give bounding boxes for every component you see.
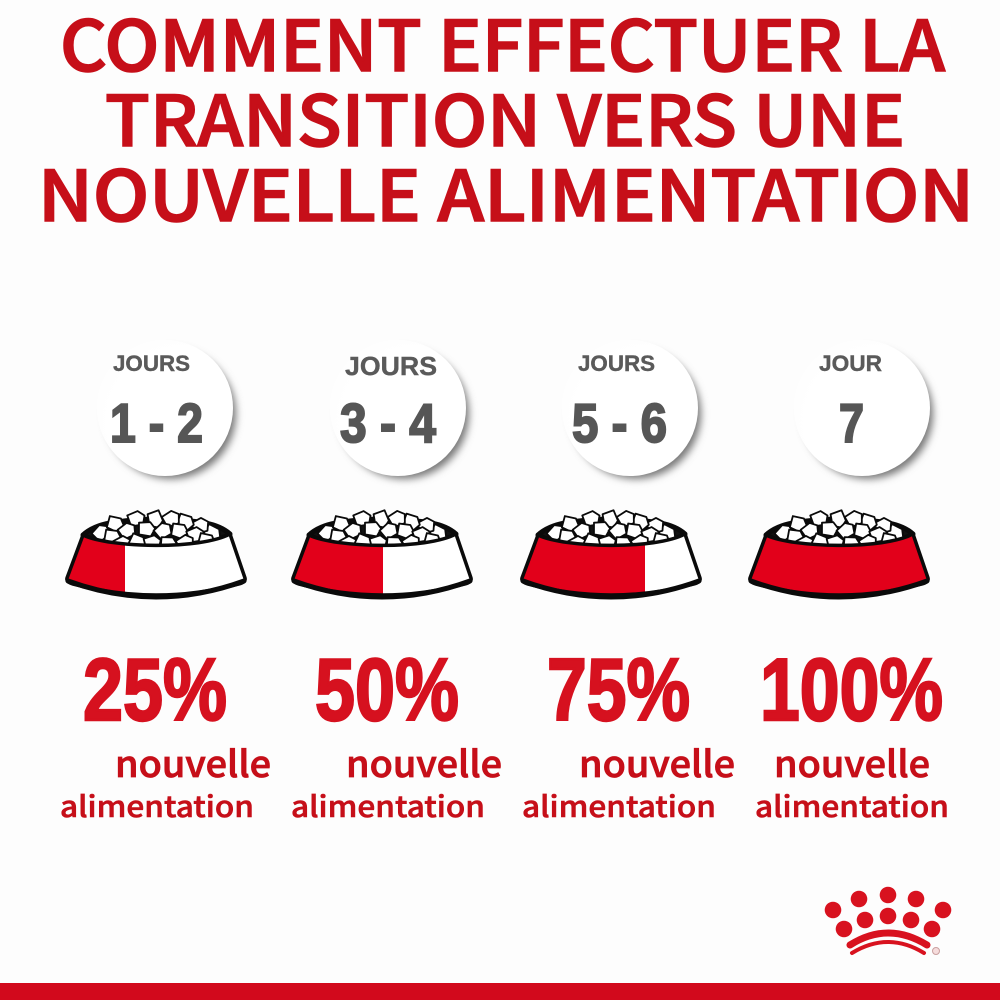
bowl 100%	[750, 509, 928, 597]
day badge 5-6	[562, 340, 701, 479]
caption 75%: nouvelle	[579, 736, 735, 788]
day badge 3-4	[330, 340, 469, 479]
caption 75%	[522, 736, 735, 826]
caption 25%: nouvelle	[115, 736, 271, 788]
bowl 75%	[520, 509, 700, 605]
caption 25%: alimentation	[60, 784, 254, 826]
day badge 5-6: 5 - 6	[572, 392, 667, 454]
title: NOUVELLE ALIMENTATION	[38, 141, 974, 242]
day badge 3-4: JOURS	[345, 351, 437, 381]
bowl 50%	[291, 509, 471, 605]
title	[38, 0, 974, 242]
caption 50%	[291, 736, 502, 826]
panel: days 3-4	[291, 340, 502, 826]
bowl 25%	[65, 509, 245, 605]
day badge 1-2	[97, 340, 236, 479]
caption 100%: alimentation	[755, 784, 949, 826]
caption 100%	[755, 736, 949, 826]
panel: days 5-6	[520, 340, 735, 826]
caption 100%: nouvelle	[774, 736, 930, 788]
caption 50%: alimentation	[291, 784, 485, 826]
day badge 7	[794, 340, 933, 479]
day badge 3-4: 3 - 4	[340, 392, 436, 454]
panel: days 1-2	[60, 340, 271, 826]
day badge 7: 7	[839, 392, 864, 454]
icon: crown logo	[825, 887, 951, 954]
percentage 100%: 100%	[760, 640, 943, 739]
footer bar	[0, 983, 1000, 1000]
day badge 1-2: JOURS	[113, 351, 190, 376]
panel: day 7	[750, 340, 949, 826]
day badge 1-2: 1 - 2	[110, 392, 203, 454]
caption 25%	[60, 736, 271, 826]
day badge 7: JOUR	[819, 351, 882, 376]
percentage 50%: 50%	[315, 640, 459, 739]
caption 75%: alimentation	[522, 784, 716, 826]
percentage 75%: 75%	[547, 640, 690, 739]
caption 50%: nouvelle	[346, 736, 502, 788]
title: TRANSITION VERS UNE	[105, 66, 905, 167]
day badge 5-6: JOURS	[578, 351, 655, 376]
percentage 25%: 25%	[83, 640, 227, 739]
